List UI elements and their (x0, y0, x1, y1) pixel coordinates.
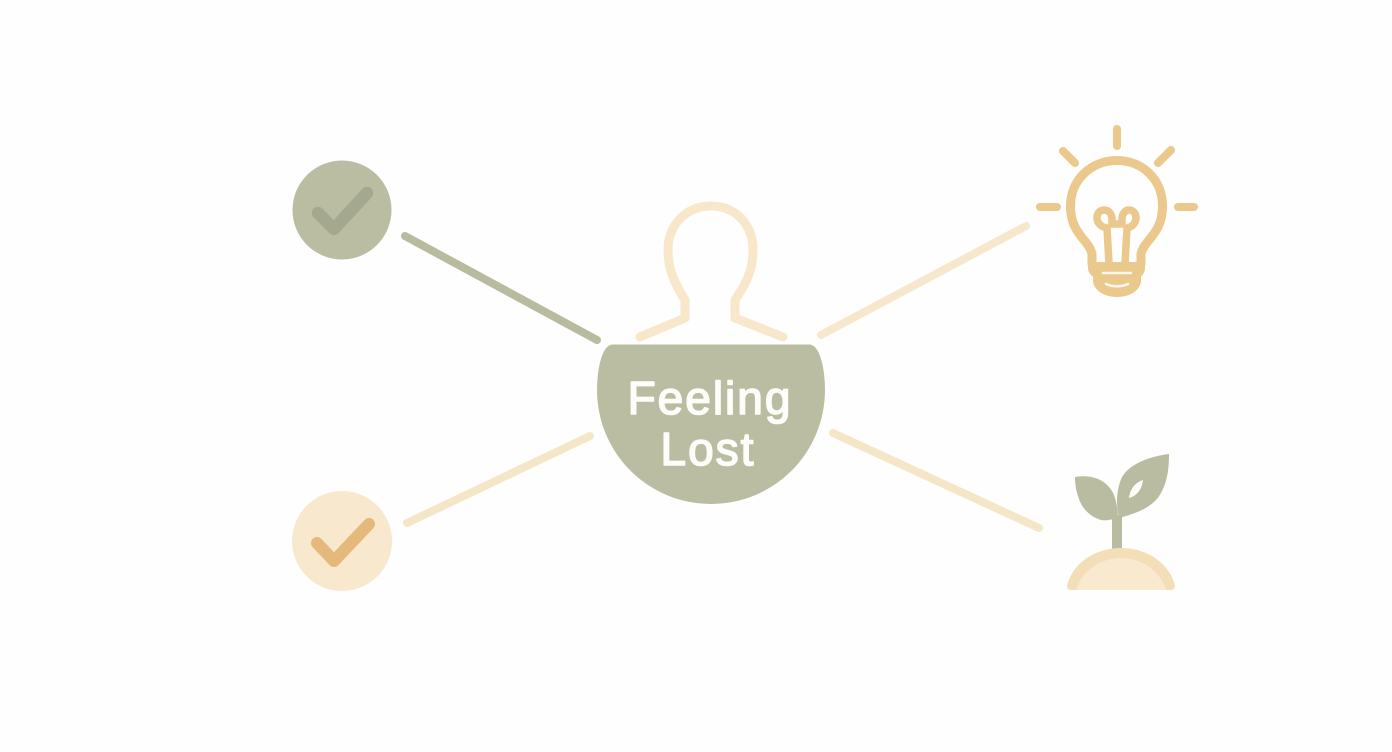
connector: centre to light bulb (821, 226, 1026, 335)
bulb filament (1097, 210, 1136, 264)
centre label: Feeling (628, 372, 792, 424)
bulb base highlights (1103, 272, 1131, 274)
icon: olive check badge (292, 160, 392, 260)
centre label: Lost (661, 423, 755, 475)
icon: light bulb (1040, 129, 1194, 296)
soil mound inner (1076, 558, 1166, 590)
connector: top-left check to centre (405, 236, 597, 340)
right leaf (1117, 454, 1169, 518)
icon: cream check badge (292, 491, 392, 591)
bulb screw base (1089, 263, 1144, 296)
left leaf (1075, 476, 1118, 520)
sprout stem (1112, 515, 1122, 550)
icon: sprout in mound (1067, 454, 1175, 590)
bulb glass (1070, 160, 1162, 264)
soil mound (1067, 548, 1175, 590)
connector: centre to sprout (833, 433, 1039, 528)
connector: bottom-left check to centre (407, 436, 590, 523)
centre badge: feeling lost (597, 344, 825, 504)
icon: person outline (640, 206, 783, 337)
bulb rays (1040, 129, 1194, 207)
leaf highlight (1129, 480, 1143, 498)
